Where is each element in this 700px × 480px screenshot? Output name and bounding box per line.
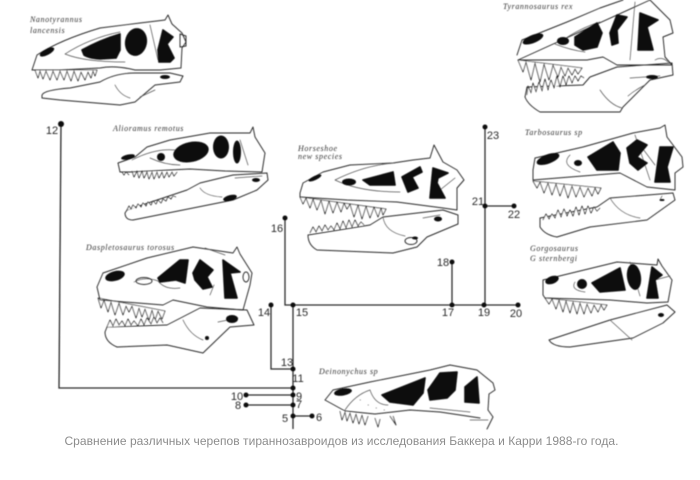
species labels: Tarbosaurus sp	[525, 128, 583, 137]
cladogram: phylogenetic tree: 23	[487, 130, 499, 142]
caption: Сравнение различных черепов тираннозавроидов из исследования Баккера и Карри 1988-го года.	[64, 434, 619, 448]
skull: Horseshoe new species	[300, 145, 464, 253]
cladogram: phylogenetic tree: 21	[472, 196, 484, 208]
cladogram: phylogenetic tree: 8	[235, 400, 241, 412]
species labels	[29, 2, 583, 376]
skull: Daspletosaurus torosus	[97, 247, 254, 353]
cladogram: phylogenetic tree: 22	[508, 209, 520, 221]
cladogram: phylogenetic tree: 15	[296, 307, 308, 319]
cladogram: phylogenetic tree: 12	[46, 125, 58, 137]
cladogram: phylogenetic tree: 14	[258, 307, 270, 319]
skull: Tyrannosaurus rex	[517, 0, 673, 112]
cladogram: phylogenetic tree: 9	[296, 391, 302, 403]
species labels: Horseshoe	[297, 144, 338, 153]
cladogram: phylogenetic tree: 16	[271, 223, 283, 235]
cladogram: phylogenetic tree: 18	[437, 257, 449, 269]
species labels: Deinonychus sp	[318, 367, 378, 376]
skull: Nanotyrannus lancensis	[32, 15, 186, 105]
cladogram: phylogenetic tree: 20	[510, 308, 522, 320]
species labels: Gorgosaurus	[530, 244, 579, 253]
skull: Gorgosaurus G. sternbergi	[543, 259, 675, 347]
cladogram: phylogenetic tree: 7	[296, 399, 302, 411]
cladogram: phylogenetic tree: 5	[282, 413, 288, 425]
skull: Tarbosaurus sp	[533, 125, 683, 237]
species labels: Tyrannosaurus rex	[503, 2, 573, 11]
species labels: lancensis	[30, 26, 65, 35]
cladogram: phylogenetic tree: 17	[442, 307, 454, 319]
skull: Alioramus remotus	[118, 127, 268, 220]
cladogram: phylogenetic tree: 11	[292, 373, 304, 385]
species labels: Daspletosaurus torosus	[85, 243, 175, 252]
species labels: G sternbergi	[530, 254, 578, 263]
cladogram: phylogenetic tree	[46, 121, 522, 429]
species labels: Nanotyrannus	[29, 15, 83, 24]
cladogram: phylogenetic tree: 19	[478, 307, 490, 319]
cladogram: phylogenetic tree: 13	[281, 357, 293, 369]
cladogram: phylogenetic tree: 6	[316, 412, 322, 424]
species labels: new species	[298, 152, 343, 161]
species labels: Alioramus remotus	[112, 124, 184, 133]
cladogram: phylogenetic tree: 10	[231, 391, 243, 403]
skull: Deinonychus sp	[325, 365, 495, 429]
